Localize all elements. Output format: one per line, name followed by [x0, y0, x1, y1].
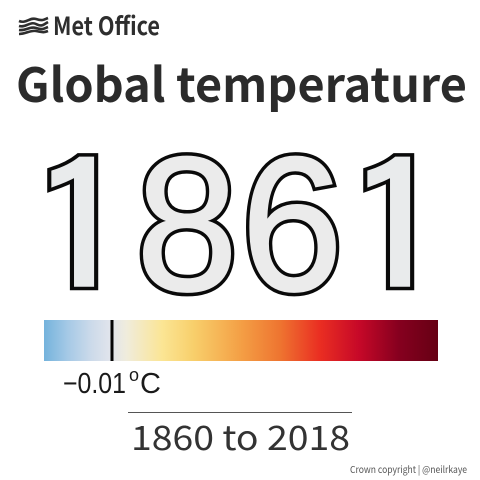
digit 1: 1 — [343, 134, 451, 317]
digit 6: 6 — [241, 118, 343, 331]
digit 1: 1 — [27, 134, 135, 317]
credit: Crown copyright | @neilrkaye — [350, 462, 467, 476]
colour scale bar — [44, 320, 438, 361]
divider line — [128, 412, 352, 413]
digit 8: 8 — [136, 118, 238, 331]
digit 1: 1 — [343, 134, 451, 317]
value label: −0.01 — [63, 368, 126, 400]
digit 1: 1 — [27, 134, 135, 317]
value label — [63, 365, 161, 400]
title: Global temperature — [16, 47, 467, 116]
unit: C — [140, 368, 161, 400]
current value marker — [110, 320, 114, 361]
digit 6: 6 — [241, 118, 343, 331]
year counter — [27, 118, 451, 331]
icon: Met Office waves logo — [19, 18, 48, 34]
date range: 1860 to 2018 — [131, 411, 350, 460]
degree symbol: o — [129, 365, 139, 385]
digit 8: 8 — [136, 118, 238, 331]
logo wordmark: Met Office — [53, 7, 160, 43]
